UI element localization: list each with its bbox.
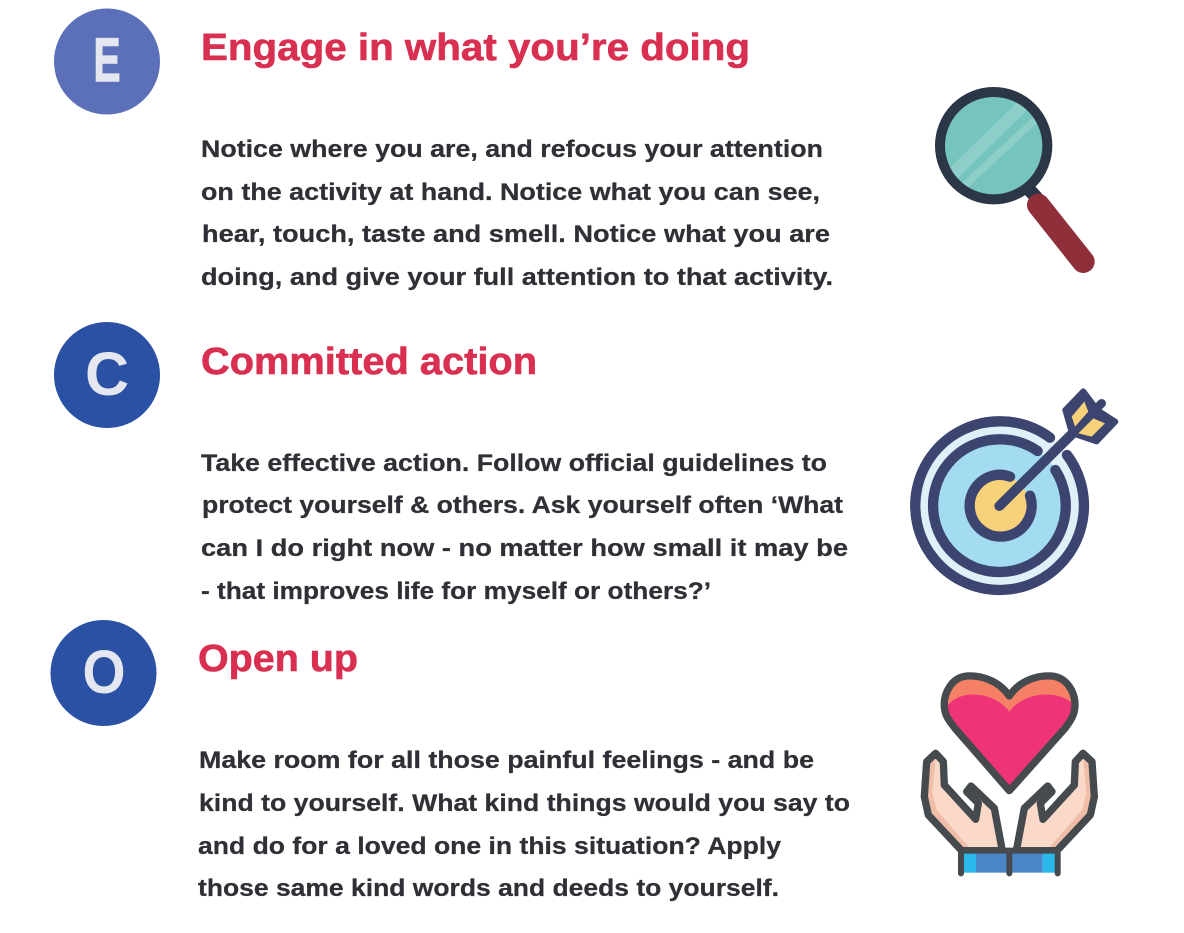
body text: Open up [198,747,850,902]
body text: Committed action [201,450,848,605]
body text: Committed action: can I do right now - no matter how small it may be [201,535,848,562]
body text: Engage: on the activity at hand. Notice what you can see, [201,179,820,206]
body text: Open up: those same kind words and deeds to yourself. [198,875,779,902]
body text: Engage: Notice where you are, and refocus your attention [201,136,823,163]
section: Open up [50,620,1094,902]
body text: Engage: hear, touch, taste and smell. Notice what you are [202,221,830,248]
icon: hands holding heart [924,673,1094,873]
body text: Open up: Make room for all those painful feelings - and be [199,747,814,774]
badge: letter O: O [82,638,126,706]
body text: Committed action: protect yourself & others. Ask yourself often ‘What [202,492,843,519]
badge: letter C: C [85,340,129,408]
section: Committed action [54,322,1116,605]
heading: Committed action: Committed action [201,341,537,383]
badge: letter E: E [94,26,120,94]
icon: magnifying glass [940,92,1083,262]
badge: letter O [50,620,156,726]
icon: target with arrow [914,391,1116,591]
body text: Engage: doing, and give your full attention to that activity. [201,264,833,291]
section: Engage [54,8,1083,291]
body text: Engage [201,136,833,291]
heading: Open up: Open up [198,638,358,680]
body text: Open up: and do for a loved one in this situation? Apply [198,833,781,860]
body text: Committed action: - that improves life for myself or others?’ [201,578,711,605]
badge: letter E [54,8,160,114]
body text: Open up: kind to yourself. What kind things would you say to [199,790,850,817]
heading: Engage in what you're doing: Engage in what you’re doing [201,27,750,69]
badge: letter C [54,322,160,428]
body text: Committed action: Take effective action. Follow official guidelines to [201,450,827,477]
